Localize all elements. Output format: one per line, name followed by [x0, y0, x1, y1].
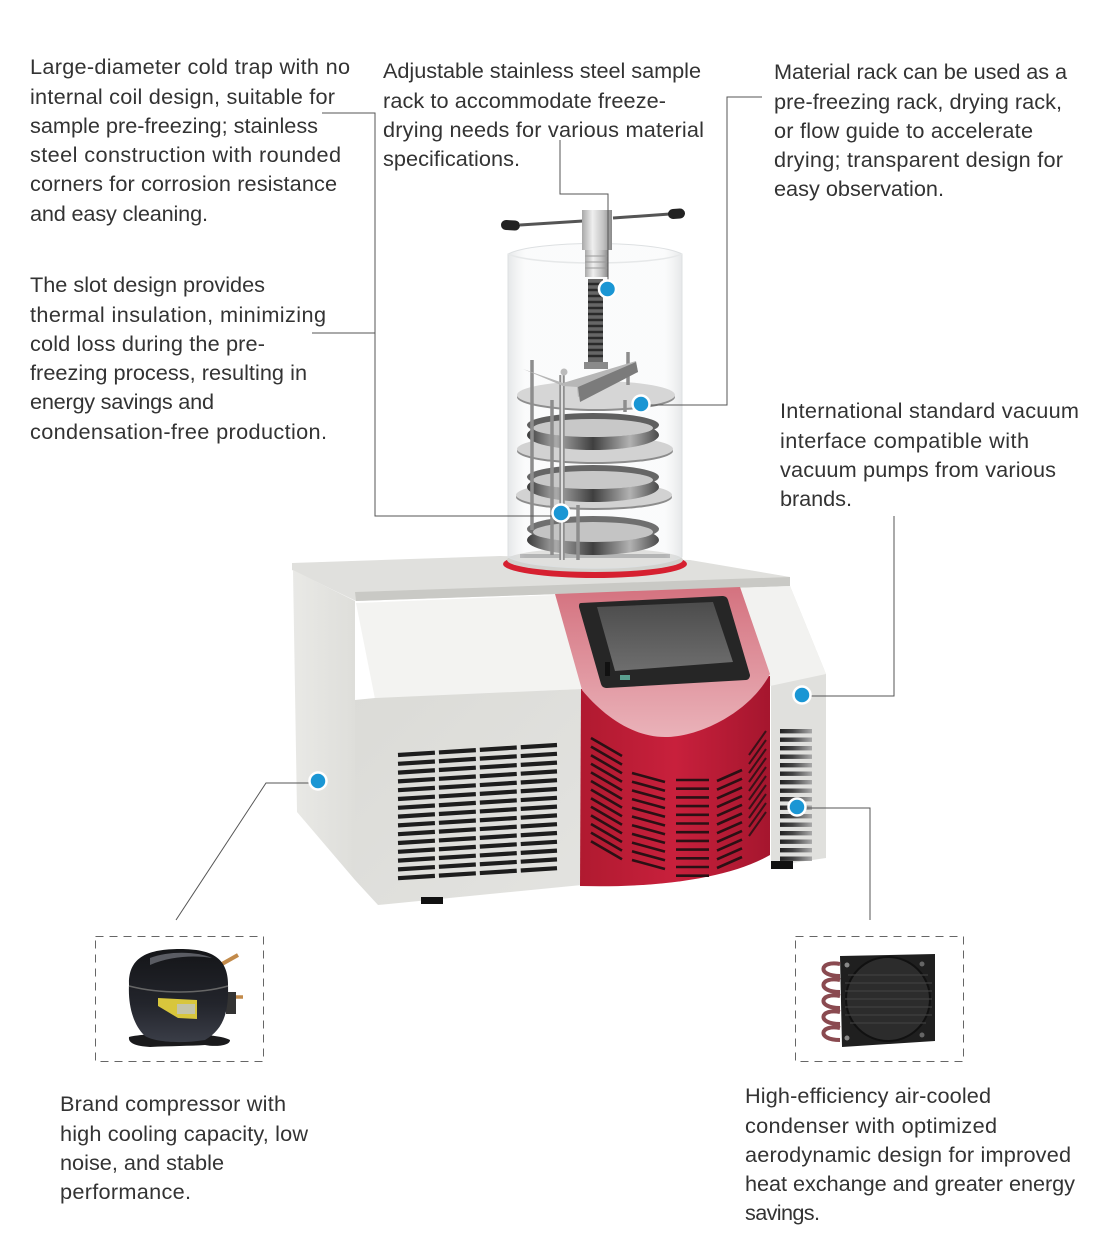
- text: condenser: High-efficiency air-cooled: [745, 1083, 991, 1108]
- feet: [421, 897, 443, 904]
- text: cold trap: steel construction with rounded: [30, 142, 341, 167]
- text: vacuum interface: interface compatible with: [780, 428, 1029, 453]
- text: slot design: The slot design provides: [30, 272, 265, 297]
- text: condenser: condenser with optimized: [745, 1113, 997, 1138]
- text: sample rack: specifications.: [383, 146, 520, 171]
- text: cold trap: internal coil design, suitable for: [30, 84, 335, 109]
- text: slot design: energy savings and: [30, 389, 214, 414]
- machine: freeze dryer body: [292, 556, 826, 905]
- text: cold trap: and easy cleaning.: [30, 201, 208, 226]
- text: compressor: performance.: [60, 1179, 191, 1204]
- left vent slats: [398, 745, 557, 878]
- bottom pan: [527, 525, 659, 555]
- text: cold trap: Large-diameter cold trap with no: [30, 54, 350, 79]
- right side panel: [739, 586, 826, 866]
- text: compressor: [60, 1091, 308, 1204]
- front upper panel: [356, 595, 582, 699]
- text: material rack: or flow guide to accelerate: [774, 118, 1033, 143]
- text: compressor: high cooling capacity, low: [60, 1121, 308, 1146]
- front lower panel with vents: [355, 689, 582, 905]
- text: compressor: Brand compressor with: [60, 1091, 286, 1116]
- top shelf: [517, 383, 675, 411]
- hotspot markers: [310, 280, 810, 816]
- shelf 2 with pan: [517, 438, 673, 464]
- icon: condenser: [823, 954, 935, 1047]
- red vent slats: [591, 738, 622, 859]
- pink upper panel: [555, 587, 770, 737]
- text: material rack: pre-freezing rack, drying rack,: [774, 89, 1062, 114]
- text: material rack: easy observation.: [774, 176, 944, 201]
- copper coils: [823, 963, 840, 1040]
- touch screen: [579, 596, 750, 688]
- text: cold trap: [30, 54, 350, 226]
- text: slot design: thermal insulation, minimizing: [30, 302, 326, 327]
- text: slot design: condensation-free production.: [30, 419, 327, 444]
- text: slot design: freezing process, resulting in: [30, 360, 307, 385]
- condenser inset: [796, 936, 964, 1062]
- text: sample rack: drying needs for various material: [383, 117, 704, 142]
- text: condenser: savings.: [745, 1200, 820, 1225]
- compressor inset: [96, 936, 264, 1062]
- text: material rack: drying; transparent design for: [774, 147, 1063, 172]
- text: vacuum interface: brands.: [780, 486, 852, 511]
- left side panel: [293, 570, 355, 880]
- text: sample rack: [383, 58, 704, 171]
- text: condenser: aerodynamic design for improved: [745, 1142, 1071, 1167]
- text: slot design: cold loss during the pre-: [30, 331, 265, 356]
- text: sample rack: Adjustable stainless steel sample: [383, 58, 701, 83]
- handle and knob: [520, 214, 670, 225]
- text: compressor: noise, and stable: [60, 1150, 224, 1175]
- screw: [588, 279, 603, 366]
- shelf 3 with pan: [516, 484, 672, 510]
- text: vacuum interface: [780, 398, 1079, 511]
- text: vacuum interface: vacuum pumps from various: [780, 457, 1056, 482]
- text: condenser: heat exchange and greater energy: [745, 1171, 1075, 1196]
- text: slot design: [30, 272, 327, 444]
- glass chamber with sample rack: [503, 210, 687, 578]
- text: material rack: [774, 59, 1068, 201]
- top plate: [292, 556, 790, 601]
- text: vacuum interface: International standard vacuum: [780, 398, 1079, 423]
- callout leader lines: [176, 97, 894, 920]
- rack rods: [532, 352, 628, 560]
- text: cold trap: sample pre-freezing; stainless: [30, 113, 318, 138]
- text: cold trap: corners for corrosion resistance: [30, 171, 337, 196]
- text: condenser: [745, 1083, 1075, 1225]
- right vent slats: [780, 729, 812, 861]
- red control panel: [580, 676, 770, 886]
- red base ring: [503, 550, 687, 578]
- top bracket: [523, 361, 638, 397]
- text: material rack: Material rack can be used as a: [774, 59, 1068, 84]
- icon: compressor: [129, 949, 243, 1047]
- text: sample rack: rack to accommodate freeze-: [383, 88, 666, 113]
- glass cylinder: [508, 244, 682, 568]
